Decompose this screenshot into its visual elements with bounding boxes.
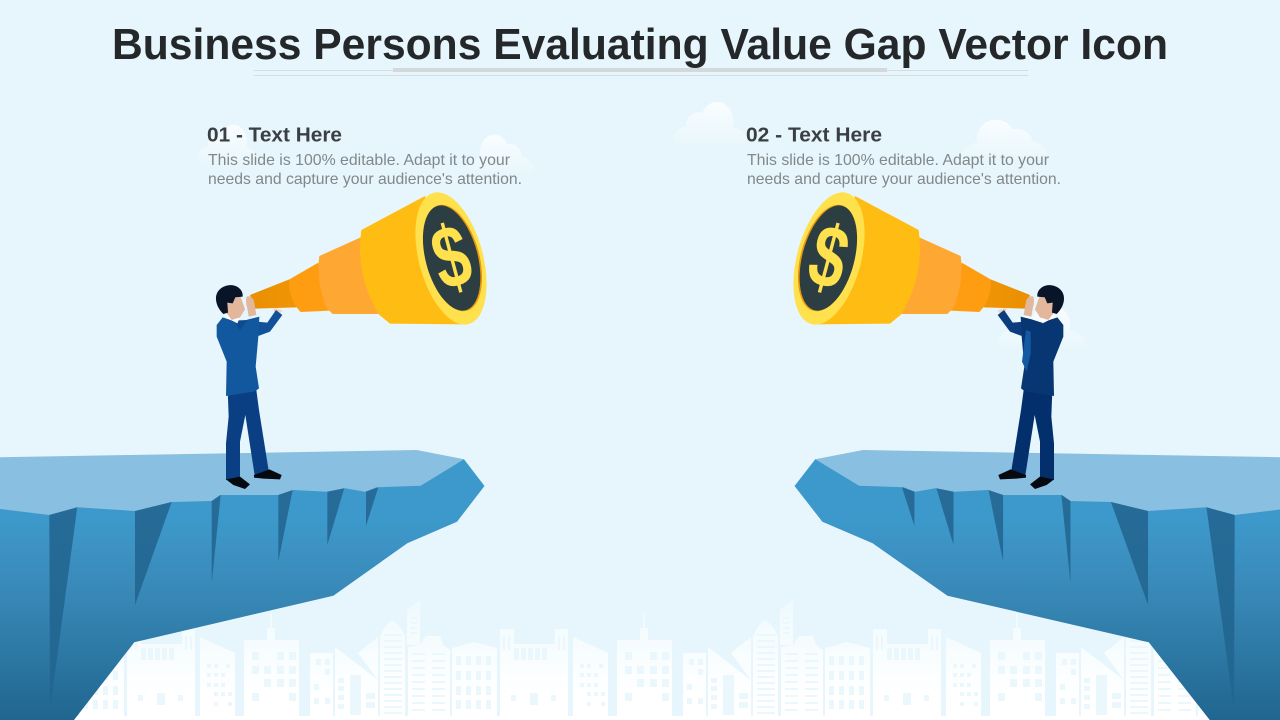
forearm <box>257 310 282 336</box>
body 01: This slide is 100% editable. Adapt it to your <box>208 152 511 169</box>
icon: right businessman <box>997 285 1064 489</box>
shoes <box>226 469 282 489</box>
cloud: behind right text <box>959 120 1047 163</box>
body 01 <box>208 152 522 188</box>
jacket lapel <box>233 320 247 330</box>
cloud: behind left heading <box>197 125 260 168</box>
cliff cracks <box>902 487 1235 710</box>
right cliff <box>795 450 1280 720</box>
heading 02: 02 - Text Here <box>746 124 882 146</box>
body 02: This slide is 100% editable. Adapt it to your <box>747 152 1050 169</box>
city skyline <box>0 600 1280 720</box>
body 01: needs and capture your audience's attention. <box>208 171 522 188</box>
cliff face <box>795 459 1280 720</box>
cliff top surface <box>0 450 464 515</box>
left cliff <box>0 450 484 720</box>
shoes <box>998 469 1054 489</box>
title: Business Persons Evaluating Value Gap Vector Icon <box>112 20 1168 69</box>
cliff top surface <box>815 450 1280 515</box>
cloud: upper centre right <box>673 102 749 150</box>
back hand <box>997 308 1007 314</box>
jacket <box>217 317 259 396</box>
icon: dollar sign: $ <box>799 206 858 309</box>
cloud: behind right person <box>998 305 1088 353</box>
icon: right telescope <box>780 185 1030 332</box>
jacket <box>1021 317 1063 396</box>
back hand <box>273 308 283 314</box>
heading 01: 01 - Text Here <box>207 124 342 146</box>
cliff face <box>0 459 484 720</box>
cliff cracks <box>49 487 378 710</box>
shirt collar <box>223 314 239 323</box>
face <box>227 295 245 320</box>
hand <box>246 296 256 317</box>
trousers <box>226 385 269 480</box>
hair <box>1037 285 1064 314</box>
shirt collar <box>1041 314 1057 323</box>
body 02 <box>747 152 1061 188</box>
text block 01 <box>207 124 522 188</box>
text block 02 <box>746 124 1061 188</box>
title underline <box>254 68 1028 76</box>
body 02: needs and capture your audience's attention. <box>747 171 1061 188</box>
icon: left telescope <box>250 185 500 332</box>
cloud: right of left text <box>467 135 533 178</box>
icon: dollar sign: $ <box>422 206 481 309</box>
forearm <box>998 310 1023 336</box>
tie <box>1022 330 1031 372</box>
trousers <box>1011 385 1054 480</box>
face <box>1035 295 1053 320</box>
hand <box>1024 296 1034 317</box>
hair <box>216 285 243 314</box>
icon: left businessman <box>216 285 283 489</box>
